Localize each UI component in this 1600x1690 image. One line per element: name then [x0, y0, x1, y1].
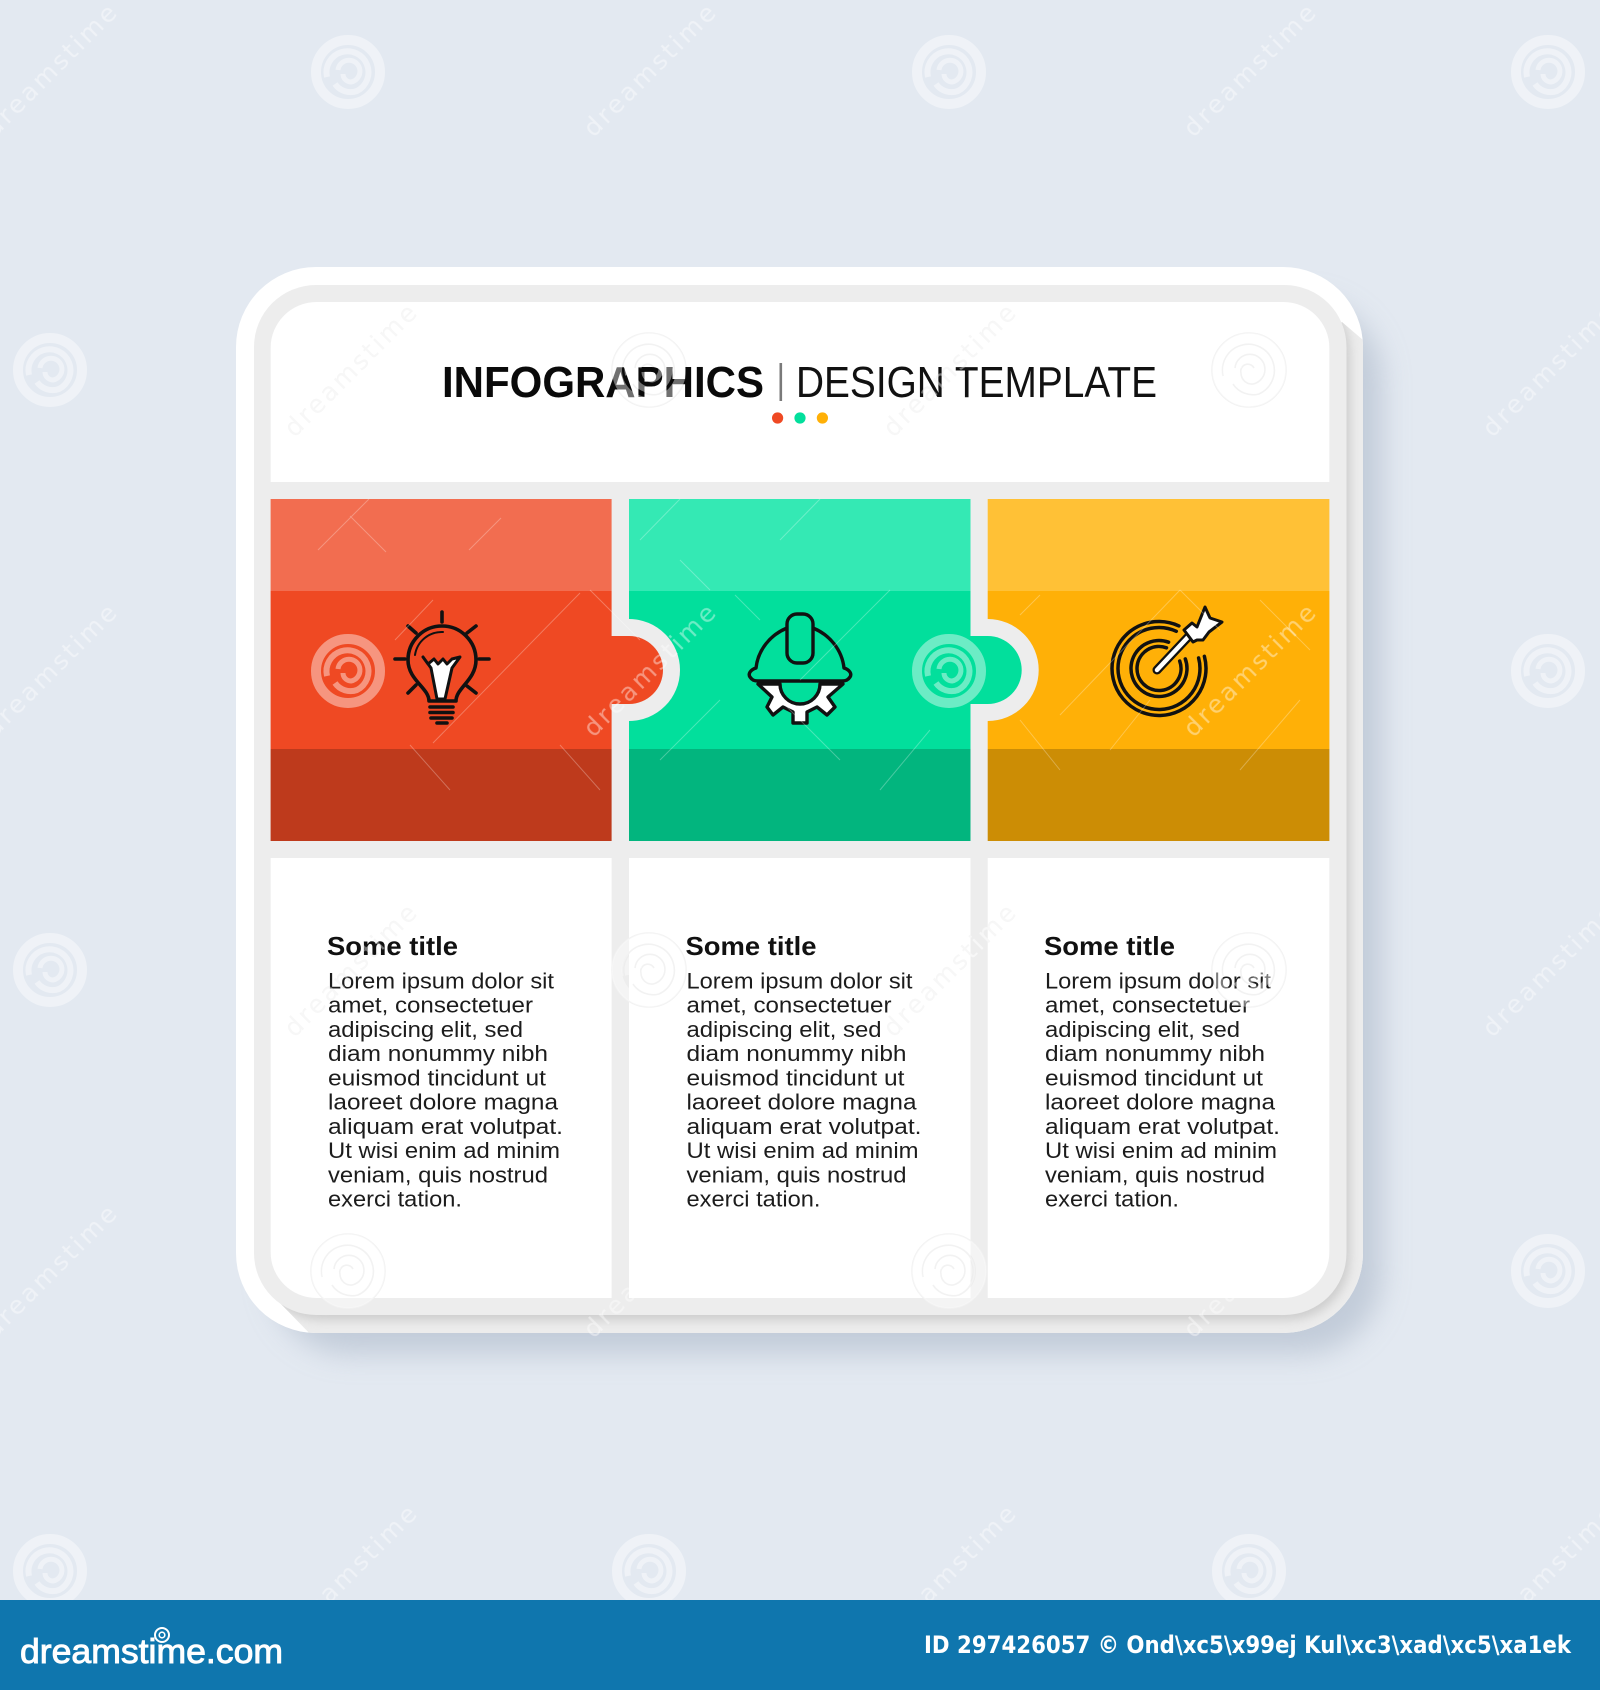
text block: column 1: Some title: [327, 931, 458, 961]
text block: column 3: veniam, quis nostrud: [1045, 1162, 1265, 1187]
footer bar: [0, 1600, 1600, 1690]
watermark text: dreamstime: [278, 1499, 422, 1643]
text block: column 3: Lorem ipsum dolor sit: [1045, 968, 1272, 993]
watermarks on white panels: dreamstime: [877, 298, 1021, 442]
puzzle tile: red: [271, 499, 612, 841]
title dots: [772, 412, 828, 424]
icon: helmet and gear: [749, 614, 851, 723]
text block: column 3: adipiscing elit, sed: [1045, 1017, 1240, 1042]
text block: column 2: Some title: [686, 931, 816, 961]
text block: column 3: amet, consectetuer: [1045, 993, 1251, 1018]
text block: column 3: exerci tation.: [1045, 1187, 1179, 1212]
text block: column 3: Some title: [1044, 931, 1175, 961]
text block: column 2: exerci tation.: [686, 1187, 820, 1212]
watermarks on white panels: dreamstime: [278, 898, 422, 1042]
text block: column 2: diam nonummy nibh: [686, 1041, 906, 1066]
card grey inner frame: [254, 285, 1346, 1315]
text block: column 1: diam nonummy nibh: [328, 1041, 548, 1066]
text block: column 3: [1044, 931, 1280, 1212]
title: [442, 358, 1157, 407]
text block: column 3: aliquam erat volutpat.: [1045, 1114, 1280, 1139]
footer logo: dreamstime.com: [20, 1633, 283, 1671]
text block: column 2: [686, 931, 922, 1212]
watermark text: dreamstime: [877, 1499, 1021, 1643]
text block: column 1: Ut wisi enim ad minim: [328, 1138, 560, 1163]
watermark text: dreamstime: [1177, 1199, 1321, 1343]
watermark text: dreamstime: [1177, 598, 1321, 742]
icon: target and arrow: [1112, 607, 1222, 715]
text block: column 2: Ut wisi enim ad minim: [686, 1138, 918, 1163]
text block: column 3: euismod tincidunt ut: [1045, 1065, 1264, 1090]
watermark text: dreamstime: [877, 898, 1021, 1042]
card 3D side strip: [281, 322, 1363, 1333]
text block: column 2: aliquam erat volutpat.: [686, 1114, 922, 1139]
text block: column 1: veniam, quis nostrud: [328, 1162, 548, 1187]
text block: column 2: Lorem ipsum dolor sit: [686, 968, 913, 993]
icon: light bulb: [395, 612, 489, 723]
text block: column 2: euismod tincidunt ut: [686, 1065, 905, 1090]
text block: column 2: laoreet dolore magna: [686, 1090, 917, 1115]
text block: column 3: diam nonummy nibh: [1045, 1041, 1265, 1066]
white cells: [271, 302, 1329, 1298]
puzzle connector: red to green: [611, 619, 680, 721]
text block: column 1: adipiscing elit, sed: [328, 1017, 523, 1042]
watermark text: dreamstime: [278, 298, 422, 442]
text block: column 1: amet, consectetuer: [328, 993, 534, 1018]
text block: column 2: veniam, quis nostrud: [686, 1162, 906, 1187]
puzzle tile: orange: [988, 499, 1329, 841]
watermark text: dreamstime: [577, 598, 721, 742]
watermark text: dreamstime: [1177, 0, 1321, 142]
watermarks on white panels: dreamstime: [877, 898, 1021, 1042]
watermark hairlines on tiles: [318, 499, 1310, 790]
card soft shadow: [270, 300, 1382, 1354]
title: DESIGN TEMPLATE: [796, 358, 1157, 407]
puzzle tile: green: [629, 499, 970, 841]
text block: column 3: Ut wisi enim ad minim: [1045, 1138, 1277, 1163]
puzzle connector: green to orange: [970, 619, 1039, 721]
text block: column 1: aliquam erat volutpat.: [328, 1114, 563, 1139]
watermark text: dreamstime: [877, 298, 1021, 442]
watermark text: dreamstime: [577, 1199, 721, 1343]
watermark text: dreamstime: [577, 0, 721, 142]
watermarks on white panels: dreamstime: [278, 298, 422, 442]
watermark text: dreamstime: [278, 898, 422, 1042]
text block: column 1: laoreet dolore magna: [328, 1090, 559, 1115]
text block: column 3: laoreet dolore magna: [1045, 1090, 1276, 1115]
header: [442, 358, 1157, 424]
text block: column 2: amet, consectetuer: [686, 993, 892, 1018]
title: INFOGRAPHICS: [442, 358, 764, 407]
card: [230, 260, 1370, 1340]
watermarks on white panels: [278, 298, 1286, 1308]
text block: column 1: [327, 931, 563, 1212]
text block: column 1: euismod tincidunt ut: [328, 1065, 547, 1090]
card outer white frame: [236, 267, 1363, 1333]
text block: column 1: exerci tation.: [328, 1187, 462, 1212]
text block: column 2: adipiscing elit, sed: [686, 1017, 882, 1042]
text block: column 1: Lorem ipsum dolor sit: [328, 968, 555, 993]
